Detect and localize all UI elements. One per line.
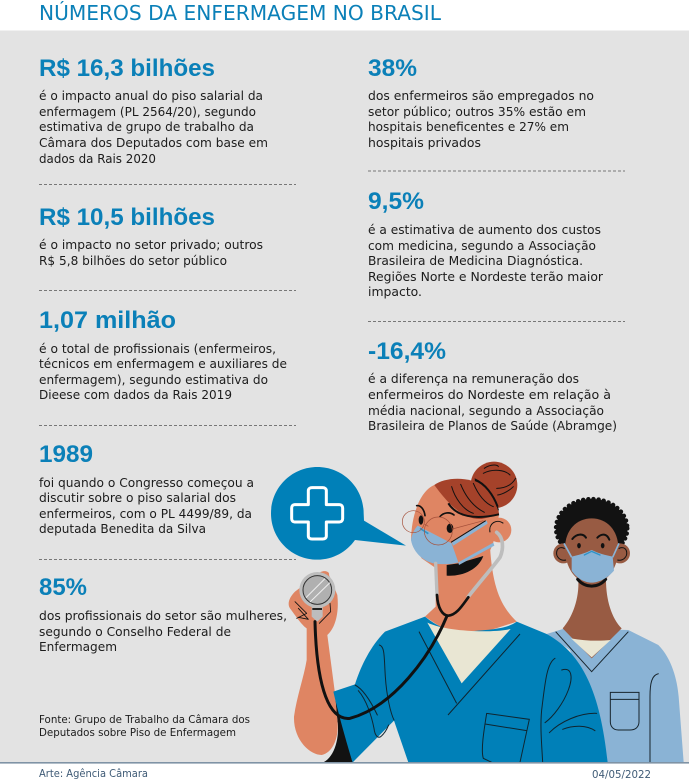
- hair lines: [452, 465, 516, 513]
- ear: [487, 518, 511, 542]
- stat description: [39, 476, 254, 537]
- stat description: [39, 89, 268, 167]
- stat value: 85%: [39, 574, 87, 601]
- stat description: é a estimativa de aumento dos custos: [368, 223, 601, 238]
- stat: 1,07 milhão: [39, 307, 287, 403]
- date: 04/05/2022: [592, 768, 651, 781]
- mask straps: [452, 521, 494, 565]
- stat value: 9,5%: [368, 188, 424, 215]
- ears: [553, 543, 630, 563]
- source note: Fonte: Grupo de Trabalho da Câmara dos: [39, 713, 250, 726]
- illustration: front nurse: [289, 462, 608, 762]
- stat description: enfermagem), segundo estimativa do: [39, 373, 268, 388]
- head: [565, 518, 618, 584]
- undershirt: [427, 623, 511, 683]
- stat description: é a diferença na remuneração dos: [368, 372, 579, 387]
- stat description: com medicina, segundo a Associação: [368, 239, 596, 254]
- stat description: Enfermagem: [39, 640, 117, 655]
- hair: [434, 479, 499, 519]
- stat description: [368, 223, 604, 300]
- footer rule: [0, 762, 689, 764]
- stat value: R$ 10,5 bilhões: [39, 204, 215, 231]
- stat description: é o impacto no setor privado; outros: [39, 238, 263, 253]
- arm group: [289, 571, 353, 762]
- stat description: dados da Rais 2020: [39, 152, 156, 167]
- stat description: [39, 238, 263, 269]
- stat description: [368, 372, 617, 434]
- stat description: é o impacto anual do piso salarial da: [39, 89, 263, 104]
- head: [411, 479, 499, 576]
- ear detail: [490, 521, 503, 532]
- stat description: dos profissionais do setor são mulheres,: [39, 609, 287, 624]
- stat description: Brasileira de Planos de Saúde (Abramge): [368, 419, 617, 434]
- black undersleeve: [323, 697, 353, 762]
- stat description: Regiões Norte e Nordeste terão maior: [368, 270, 604, 285]
- stat description: hospitais beneficentes e 27% em: [368, 120, 569, 135]
- stat value: 1989: [39, 441, 93, 468]
- finger lines: [295, 602, 331, 623]
- stat description: enfermeiros do Nordeste em relação à: [368, 388, 611, 403]
- stat description: hospitais privados: [368, 136, 481, 151]
- stat: 9,5%: [368, 188, 604, 300]
- head group: [402, 462, 517, 576]
- stethoscope chest piece: [299, 572, 335, 622]
- stat description: foi quando o Congresso começou a: [39, 476, 254, 491]
- neck: [563, 580, 622, 658]
- source note: [39, 713, 250, 739]
- neck and chest: [425, 547, 517, 640]
- undershirt: [571, 638, 611, 657]
- stat description: segundo o Conselho Federal de: [39, 625, 231, 640]
- stat description: estimativa de grupo de trabalho da: [39, 120, 254, 135]
- bubble: [271, 467, 406, 560]
- stat description: Brasileira de Medicina Diagnóstica.: [368, 254, 583, 269]
- stat description: impacto.: [368, 285, 422, 300]
- stat description: discutir sobre o piso salarial dos: [39, 491, 236, 506]
- source note: Deputados sobre Piso de Enfermagem: [39, 726, 236, 739]
- stat description: [39, 342, 287, 403]
- collar lines: [556, 632, 628, 672]
- mask fold: [420, 521, 486, 542]
- stat value: -16,4%: [368, 338, 446, 365]
- scrubs: [547, 628, 684, 762]
- hair bun edge: [475, 480, 498, 507]
- hair band: [448, 503, 499, 517]
- beard shadow: [447, 556, 483, 576]
- stethoscope tubes: [315, 532, 502, 718]
- hair: [556, 499, 627, 558]
- hair bun: [471, 462, 517, 508]
- stat: R$ 16,3 bilhões: [39, 55, 268, 167]
- face mask: [572, 550, 614, 583]
- arm and hand: [289, 571, 338, 755]
- illustration: back nurse: [547, 499, 684, 762]
- face mask: [411, 526, 458, 564]
- stat description: dos enfermeiros são empregados no: [368, 89, 594, 104]
- stat description: deputada Benedita da Silva: [39, 522, 206, 537]
- stat description: R$ 5,8 bilhões do setor público: [39, 254, 227, 269]
- head and neck group: [553, 499, 630, 658]
- scrubs seams: [355, 645, 597, 762]
- stat value: 1,07 milhão: [39, 307, 176, 334]
- stat description: setor público; outros 35% estão em: [368, 105, 586, 120]
- speech bubble: [271, 467, 406, 560]
- icon: medical cross: [292, 488, 343, 539]
- stat: -16,4%: [368, 338, 617, 434]
- illustration: nurses: [271, 462, 684, 762]
- scrubs: [333, 617, 608, 762]
- credit: Arte: Agência Câmara: [39, 767, 148, 780]
- pocket: [610, 692, 639, 730]
- stat: 85%: [39, 574, 287, 655]
- brows and eyes: [572, 535, 609, 548]
- stat value: R$ 16,3 bilhões: [39, 55, 215, 82]
- stat: 1989: [39, 441, 254, 537]
- stat description: é o total de profissionais (enfermeiros,: [39, 342, 276, 357]
- mask straps and nose: [564, 543, 619, 557]
- eyes and brows: [417, 506, 454, 533]
- stat description: enfermagem (PL 2564/20), segundo: [39, 105, 256, 120]
- stat: R$ 10,5 bilhões: [39, 204, 263, 269]
- stat value: 38%: [368, 55, 417, 82]
- collar lines: [419, 632, 520, 715]
- glasses: [402, 511, 483, 545]
- stat description: Dieese com dados da Rais 2019: [39, 388, 232, 403]
- stat: 38%: [368, 55, 594, 151]
- seam: [650, 674, 659, 762]
- stat description: técnicos em enfermagem e auxiliares de: [39, 357, 287, 372]
- stat description: Câmara dos Deputados com base em: [39, 136, 268, 151]
- title: NÚMEROS DA ENFERMAGEM NO BRASIL: [39, 0, 442, 25]
- stat description: enfermeiros, com o PL 4499/89, da: [39, 507, 252, 522]
- stat description: média nacional, segundo a Associação: [368, 404, 604, 419]
- stat description: [368, 89, 594, 151]
- nose wire: [584, 551, 600, 555]
- jaw shadow: [578, 579, 606, 586]
- stat description: [39, 609, 287, 655]
